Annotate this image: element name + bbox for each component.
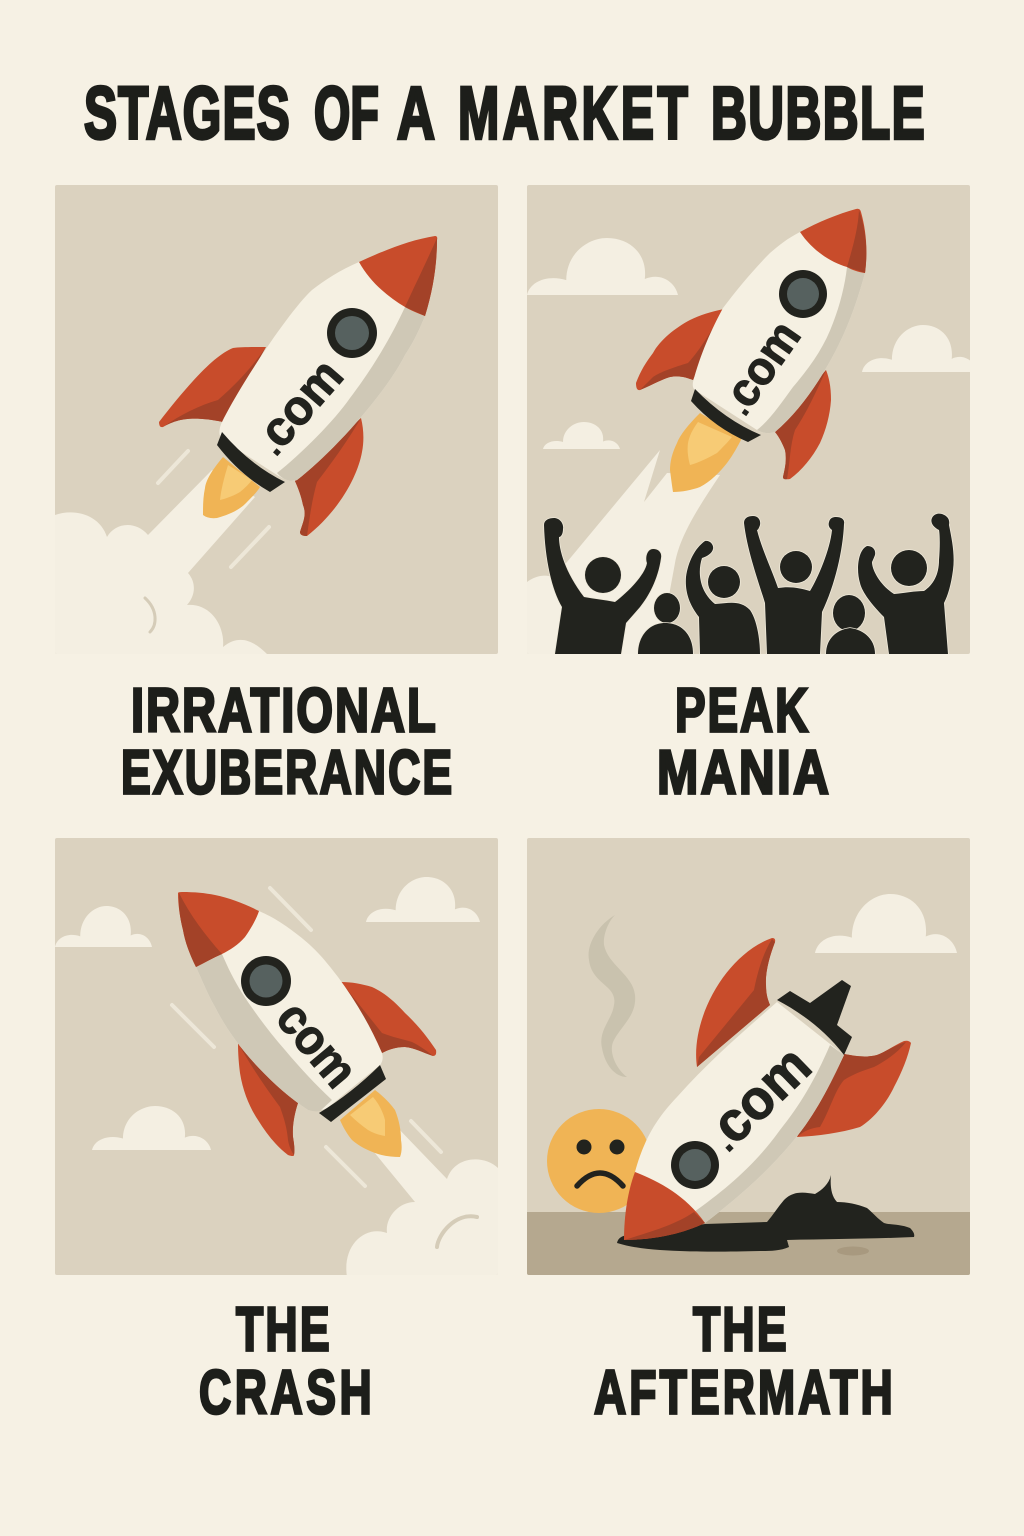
label: irrational exuberance: IRRATIONAL (131, 675, 436, 745)
label: irrational exuberance: EXUBERANCE (121, 739, 452, 807)
rocket with com label (178, 892, 436, 1157)
label: the aftermath (594, 1296, 893, 1427)
puddle shadow (837, 1246, 869, 1256)
label: the crash: CRASH (199, 1359, 372, 1427)
cheering crowd (544, 514, 954, 654)
label: peak mania: PEAK (675, 676, 808, 745)
label: peak mania (657, 676, 829, 807)
label: the crash: THE (236, 1296, 330, 1364)
label: the aftermath: AFTERMATH (594, 1359, 893, 1427)
label: peak mania: MANIA (657, 737, 829, 807)
rocket with .com label: .com (244, 349, 354, 464)
exhaust trail and smoke cloud (55, 470, 267, 654)
cloud (815, 894, 957, 953)
oil puddle (617, 1175, 914, 1252)
title (84, 72, 925, 155)
title: OF (314, 73, 379, 155)
panel: the aftermath (527, 838, 970, 1275)
rocket with .com label: .com (710, 310, 811, 423)
crashed rocket with .com label: .com (693, 1033, 823, 1162)
panel: the crash (55, 838, 498, 1277)
title: MARKET (458, 73, 688, 155)
panel: peak mania (527, 185, 977, 654)
sad face (547, 1109, 651, 1213)
label: the crash (199, 1296, 372, 1427)
title: BUBBLE (711, 73, 925, 155)
ground (527, 1212, 970, 1275)
exhaust trail and smoke cloud (346, 1125, 498, 1277)
exhaust trail (527, 450, 720, 654)
label: irrational exuberance (121, 675, 452, 807)
rocket with com label: com (266, 990, 369, 1098)
panel: irrational exuberance (55, 185, 498, 654)
label: the aftermath: THE (693, 1296, 787, 1364)
title: STAGES (84, 73, 290, 155)
speed lines (158, 451, 269, 567)
clouds (527, 238, 977, 449)
smoke wisp (589, 915, 635, 1077)
clouds (55, 877, 480, 1150)
title: A (397, 72, 435, 155)
crashed rocket with .com label (624, 938, 911, 1240)
rocket with .com label (159, 236, 437, 536)
speed lines (172, 888, 441, 1186)
rocket with .com label (636, 209, 866, 492)
